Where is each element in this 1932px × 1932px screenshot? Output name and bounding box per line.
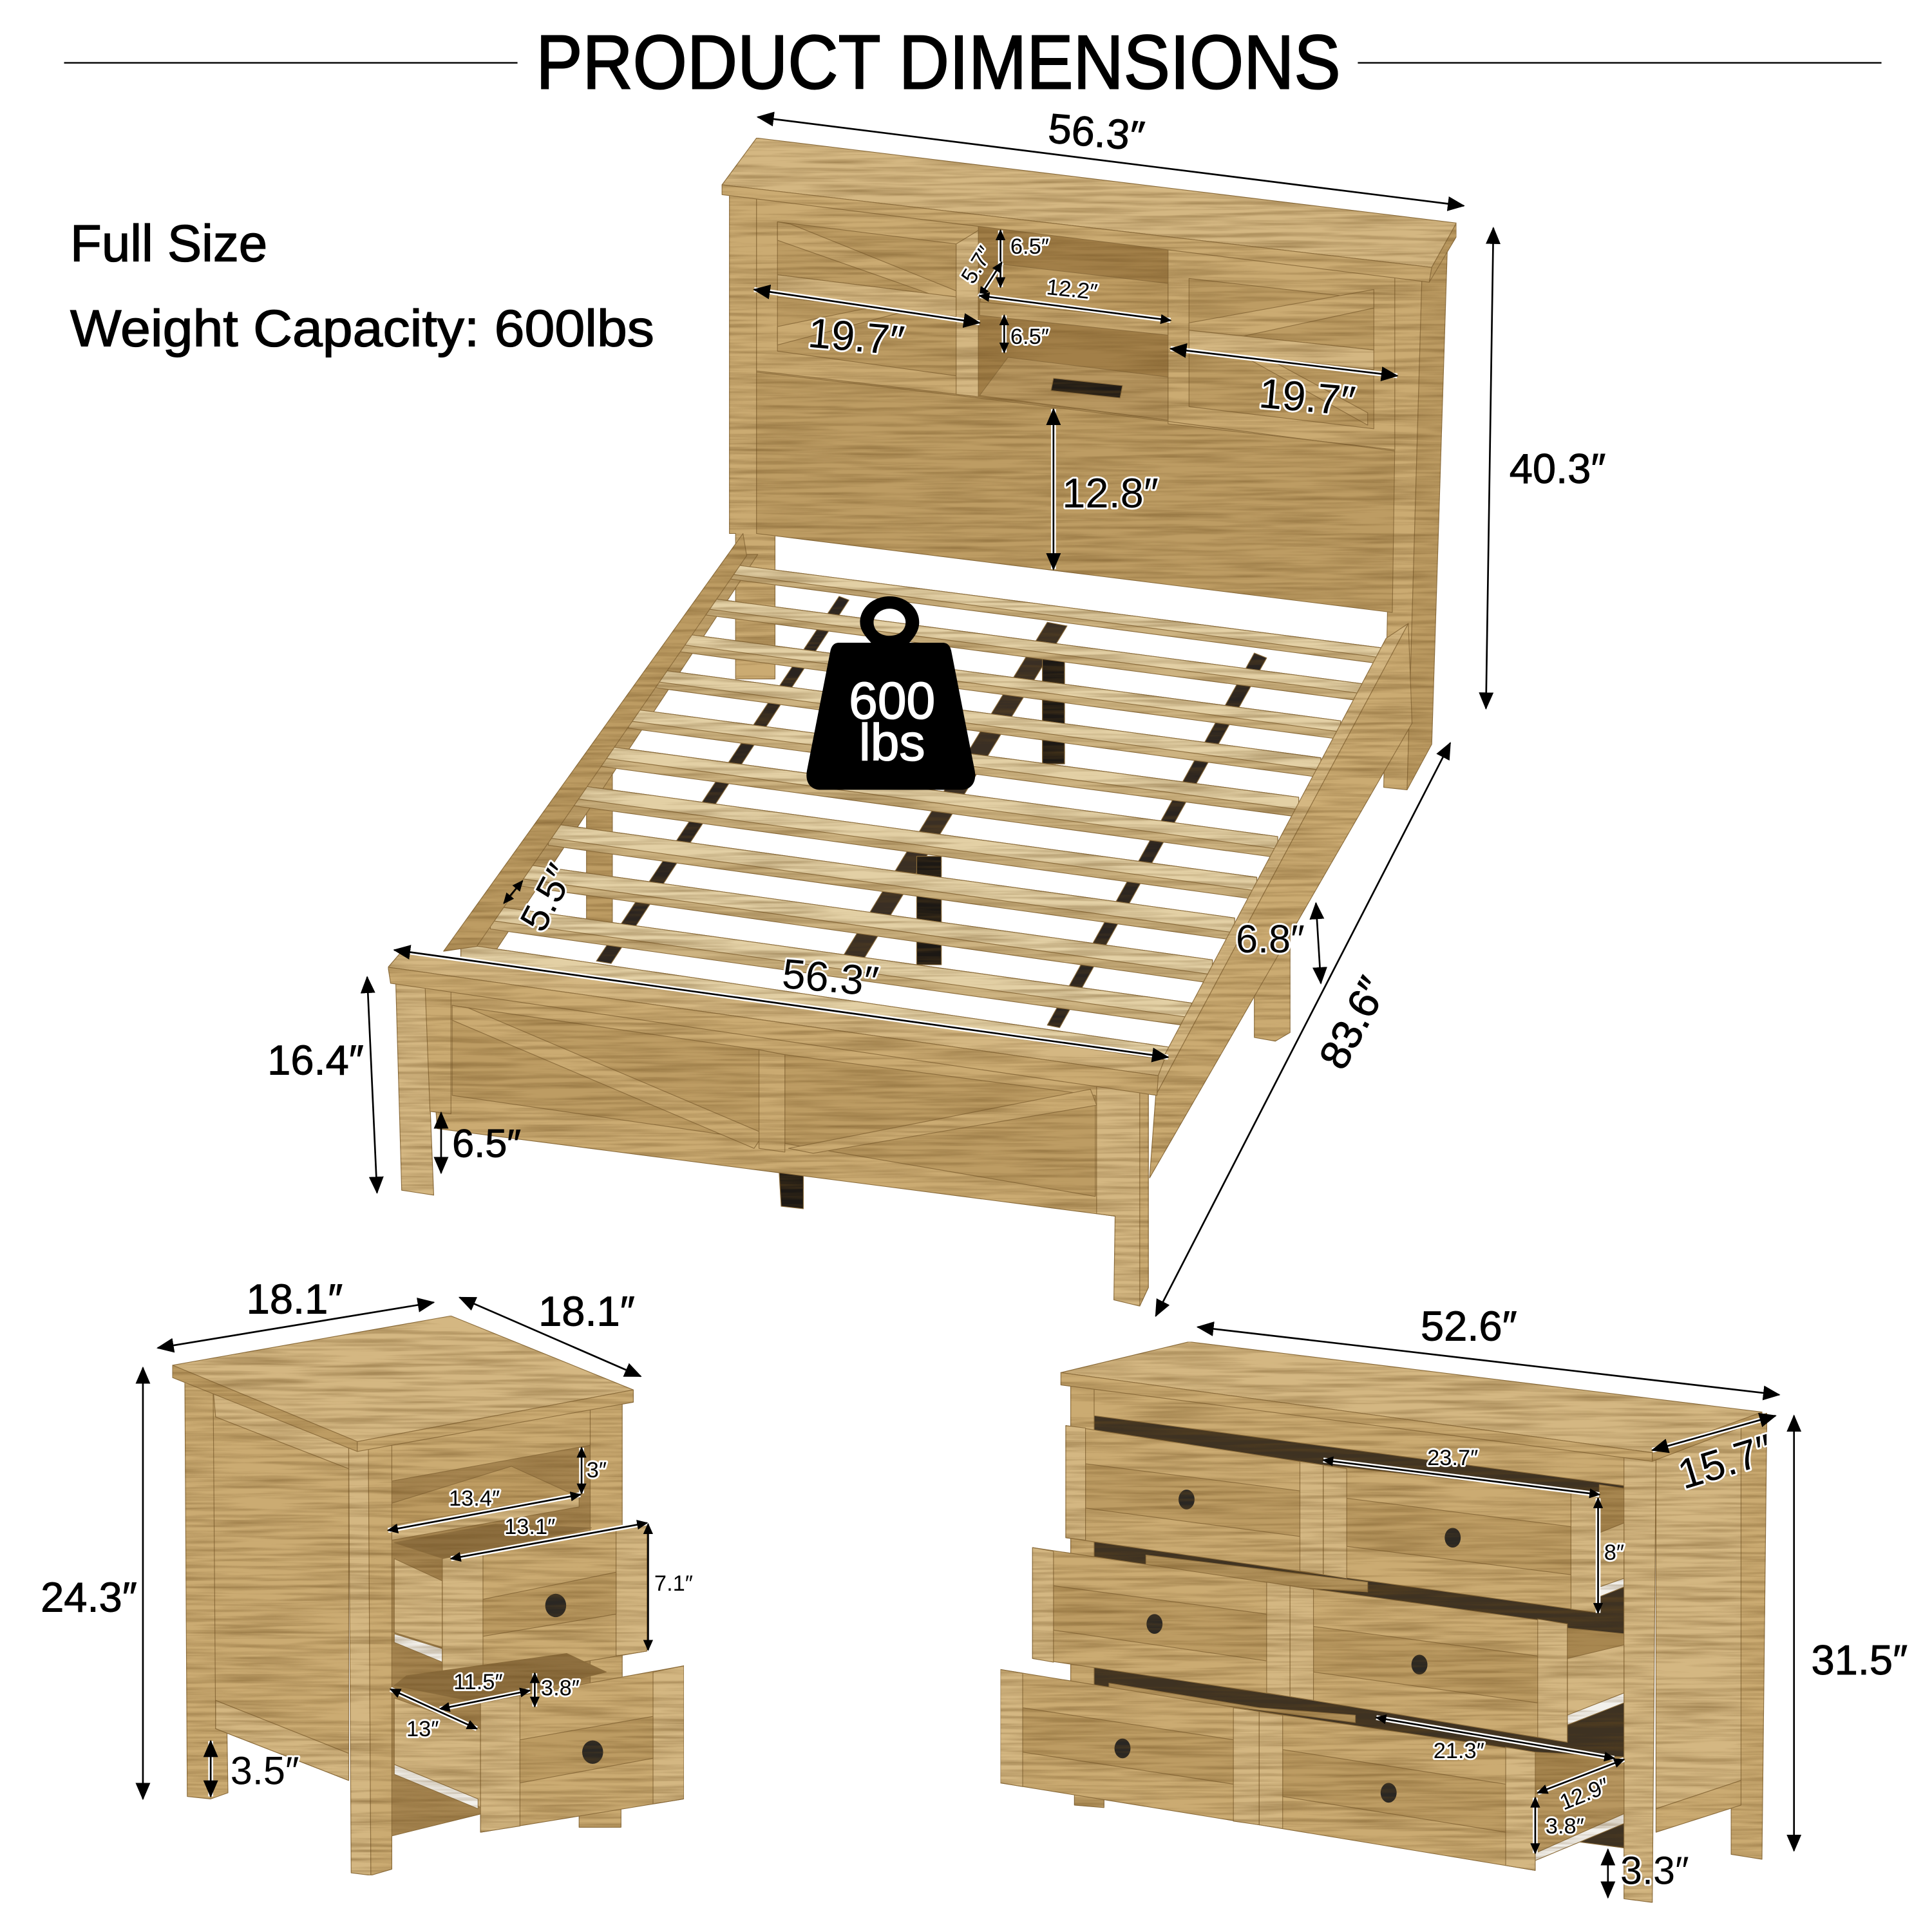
inner drawer surfaces [1109, 1484, 1624, 1794]
dimension: bottom drawer height 3.8: 3.8″ [1546, 1814, 1584, 1839]
dimension: dresser height 31.5: 31.5″ [1811, 1636, 1908, 1683]
dimension: headboard width 56.3 [758, 104, 1464, 206]
dimension: cubby width 12.2: 12.2″ [1045, 275, 1099, 305]
bed slats [461, 564, 1384, 1072]
dimension: right door 19.7: 19.7″ [1257, 370, 1358, 424]
headboard lower panel [757, 367, 1395, 612]
title: PRODUCT DIMENSIONS [536, 21, 1341, 106]
dimension: bottom drawer width 21.3: 21.3″ [1434, 1739, 1484, 1763]
dimension: lower drawer height 3.8 [535, 1673, 580, 1707]
dimension: nightstand leg 3.5: 3.5″ [231, 1748, 299, 1792]
drawer row 2 [1032, 1548, 1624, 1742]
dimension: lower drawer width 11.5: 11.5″ [453, 1670, 503, 1694]
dimension: upper drawer width 13.1 [451, 1515, 647, 1558]
panel: dresser illustration [1001, 1303, 1908, 1902]
dimension: rail clearance 6.8: 6.8″ [1236, 917, 1305, 961]
dimension: dresser depth 15.7: 15.7″ [1672, 1425, 1778, 1498]
dresser top [1061, 1342, 1762, 1461]
rear leg and side panel [1656, 1414, 1767, 1859]
dimension: nightstand depth 18.1 [460, 1288, 641, 1376]
dimension: right door 19.7 [1171, 348, 1397, 424]
headboard top cap [722, 138, 1456, 282]
dimension: lower drawer depth 13: 13″ [406, 1717, 439, 1741]
nightstand top [173, 1316, 633, 1452]
middle right leg [1255, 924, 1290, 1041]
front top rail [392, 1407, 590, 1481]
dimension: lower drawer depth 13 [391, 1689, 477, 1741]
dimension: footboard width 56.3 [394, 950, 1168, 1057]
shelf [392, 1466, 579, 1540]
panel: nightstand illustration [41, 1276, 693, 1875]
dimension: lower cubby height 6.5 [1004, 316, 1049, 352]
dimension: shelf height 3: 3″ [587, 1458, 607, 1482]
dimension: footboard height 16.4 [267, 977, 377, 1193]
side panel [213, 1390, 348, 1781]
dimension: cubby depth 5.7: 5.7″ [957, 242, 998, 288]
dimension: bottom drawer width 21.3 [1376, 1718, 1614, 1763]
dimension: foot clearance 6.5: 6.5″ [452, 1122, 521, 1166]
dimension: bottom drawer depth 12.9 [1538, 1759, 1624, 1815]
text block: size and weight capacity: Full Size [70, 215, 267, 273]
text block: size and weight capacity: Weight Capacity: 600lbs [70, 300, 654, 358]
dimension: nightstand depth 18.1: 18.1″ [538, 1288, 635, 1335]
dimension: top drawer height 8: 8″ [1604, 1540, 1624, 1565]
left side rail [444, 533, 746, 951]
dimension: left door 19.7: 19.7″ [806, 309, 906, 365]
middle left leg [587, 757, 612, 942]
drawer row 3 [1001, 1669, 1624, 1870]
right door [1168, 247, 1395, 450]
dimension: bed length 83.6: 83.6″ [1310, 969, 1397, 1076]
footboard [388, 950, 1164, 1306]
dimension: top drawer width 23.7 [1323, 1446, 1599, 1495]
dimension: nightstand leg 3.5 [211, 1741, 299, 1797]
dimension: under headboard 12.8: 12.8″ [1062, 469, 1159, 516]
dimension: foot clearance 6.5 [441, 1113, 521, 1173]
dimension: lower drawer height 3.8: 3.8″ [541, 1676, 580, 1701]
dimension: nightstand width 18.1: 18.1″ [247, 1276, 343, 1323]
left body post [1071, 1380, 1094, 1786]
dimension: left door 19.7 [754, 290, 980, 365]
headboard cubby [978, 222, 1168, 420]
right rear post [590, 1399, 622, 1805]
dimension: upper drawer width 13.1: 13.1″ [504, 1515, 555, 1539]
dimension: upper cubby height 6.5 [1001, 231, 1049, 287]
dimension: footboard width 56.3: 56.3″ [781, 950, 880, 1005]
dresser artwork [1001, 1342, 1767, 1902]
upper drawer [394, 1524, 647, 1685]
dimension: nightstand height 24.3: 24.3″ [41, 1574, 137, 1621]
dimension: dresser leg 3.3: 3.3″ [1620, 1848, 1689, 1892]
dimension: shelf width 13.4: 13.4″ [449, 1486, 500, 1511]
icon: 600 lbs weight [806, 596, 975, 790]
dimension: nightstand width 18.1 [158, 1276, 433, 1348]
front leg [348, 1439, 392, 1875]
support beams [596, 596, 1267, 1209]
dimension: upper cubby height 6.5: 6.5″ [1010, 234, 1049, 259]
cabinet interior [392, 1407, 591, 1836]
dimension: bottom drawer depth 12.9: 12.9″ [1557, 1774, 1613, 1815]
rear foot [579, 1805, 621, 1827]
dimension: bed length 83.6 [1156, 743, 1450, 1316]
dimension: dresser width 52.6 [1198, 1303, 1779, 1395]
lower drawer [394, 1654, 684, 1832]
dimension: dresser width 52.6: 52.6″ [1421, 1303, 1517, 1350]
dimension: cubby width 12.2 [980, 275, 1171, 320]
dimension: headboard width 56.3: 56.3″ [1046, 104, 1146, 160]
icon: 600 lbs weight: 600 [849, 672, 935, 730]
front right stile [1624, 1452, 1656, 1902]
front left foot [1074, 1774, 1104, 1808]
nightstand artwork [173, 1316, 684, 1875]
top rail [1071, 1380, 1627, 1486]
dimension: headboard height 40.3 [1486, 228, 1605, 708]
text block: size and weight capacity [70, 215, 654, 358]
dimension: shelf height 3 [582, 1448, 607, 1493]
dimension: top drawer width 23.7: 23.7″ [1427, 1446, 1478, 1470]
dimension: rail clearance 6.8 [1236, 903, 1321, 983]
slat ledge [468, 554, 758, 951]
dimension: shelf width 13.4 [388, 1486, 580, 1530]
drawer row 1 [1066, 1426, 1624, 1613]
door bottom shadow [757, 372, 1395, 451]
dimension: footboard height 16.4: 16.4″ [267, 1036, 364, 1083]
left door [757, 194, 978, 397]
back left post [730, 191, 775, 679]
dimension: lower drawer width 11.5 [440, 1670, 530, 1709]
body interior [1071, 1380, 1627, 1848]
dimension: upper drawer height 7.1: 7.1″ [654, 1571, 693, 1596]
dimension: slat gap 5.5: 5.5″ [511, 857, 582, 938]
bed frame artwork [388, 138, 1456, 1306]
dimension: bottom drawer height 3.8 [1535, 1797, 1584, 1853]
left rear post [185, 1378, 228, 1799]
dimension: lower cubby height 6.5: 6.5″ [1010, 325, 1049, 349]
back right post [1384, 234, 1448, 790]
panel: bed illustration [267, 104, 1605, 1316]
right side rail [1148, 623, 1412, 1178]
icon: 600 lbs weight: lbs [859, 714, 925, 772]
dimension: headboard height 40.3: 40.3″ [1510, 445, 1605, 492]
